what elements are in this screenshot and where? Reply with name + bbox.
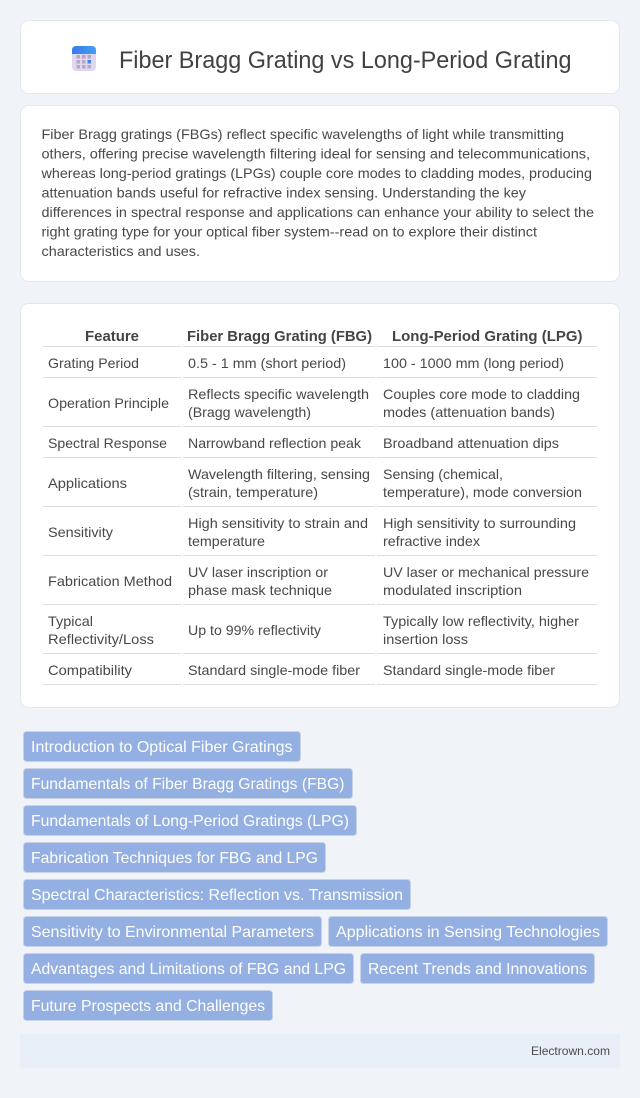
tag: recent trends bbox=[360, 954, 594, 984]
row: typical reflectivity/loss: Up to 99% reflectivity bbox=[188, 622, 321, 638]
row: typical reflectivity/loss bbox=[48, 613, 579, 647]
row: typical reflectivity/loss: Typical bbox=[48, 613, 93, 629]
row: operation principle: Couples core mode to cladding bbox=[383, 386, 580, 402]
tag: advantages: Advantages and Limitations of FBG and LPG bbox=[31, 961, 346, 978]
tag: applications: Applications in Sensing Technologies bbox=[336, 924, 600, 941]
tag: fundamentals of FBG: Fundamentals of Fiber Bragg Gratings (FBG) bbox=[31, 776, 344, 793]
row: grating period: 100 - 1000 mm (long period) bbox=[383, 355, 564, 371]
row: fabrication method: UV laser or mechanical pressure bbox=[383, 564, 589, 580]
tag: spectral characteristics: Spectral Characteristics: Reflection vs. Transmission bbox=[31, 887, 403, 904]
row: sensitivity: High sensitivity to strain and bbox=[188, 515, 368, 531]
table rule lines bbox=[43, 346, 597, 685]
row: operation principle: (Bragg wavelength) bbox=[188, 404, 311, 420]
tag: introduction bbox=[24, 732, 300, 762]
row: sensitivity: High sensitivity to surrounding bbox=[383, 515, 576, 531]
panel: introduction bbox=[20, 106, 620, 282]
tag: fabrication techniques: Fabrication Techniques for FBG and LPG bbox=[31, 850, 318, 867]
row: applications: Applications bbox=[48, 475, 127, 491]
intro paragraph: characteristics and uses. bbox=[42, 243, 200, 259]
intro paragraph: right grating type for your optical fiber system--read on to explore their distinct bbox=[42, 224, 537, 240]
header panel bbox=[20, 20, 620, 94]
row: operation principle: modes (attenuation bands) bbox=[383, 404, 555, 420]
row: fabrication method: phase mask technique bbox=[188, 582, 332, 598]
tag: future prospects: Future Prospects and Challenges bbox=[31, 998, 265, 1015]
row: fabrication method: modulated inscription bbox=[383, 582, 522, 598]
row: compatibility: Standard single-mode fiber bbox=[188, 662, 360, 678]
tag: recent trends: Recent Trends and Innovations bbox=[368, 961, 587, 978]
row: operation principle: Reflects specific wavelength bbox=[188, 386, 369, 402]
row: typical reflectivity/loss: Typically low reflectivity, higher bbox=[383, 613, 579, 629]
row: fabrication method bbox=[48, 564, 589, 598]
icon: calendar bbox=[72, 46, 96, 71]
row: grating period bbox=[48, 355, 564, 371]
intro paragraph: others, offering precise wavelength filtering ideal for sensing and telecommunications, bbox=[42, 146, 590, 162]
tag: fundamentals of FBG bbox=[24, 768, 352, 798]
row: applications: Wavelength filtering, sensing bbox=[188, 466, 370, 482]
row: applications: temperature), mode conversion bbox=[383, 484, 582, 500]
row: typical reflectivity/loss: Reflectivity/Loss bbox=[48, 631, 154, 647]
row: grating period: 0.5 - 1 mm (short period) bbox=[188, 355, 346, 371]
table header row: Long-Period Grating (LPG) bbox=[392, 328, 582, 345]
table header row: Feature bbox=[85, 328, 139, 345]
panel: comparison table bbox=[20, 304, 620, 708]
tag: fundamentals of LPG bbox=[24, 806, 356, 836]
title: Fiber Bragg Grating vs Long-Period Grating bbox=[119, 47, 572, 74]
row: spectral response: Spectral Response bbox=[48, 435, 167, 451]
row: applications: (strain, temperature) bbox=[188, 484, 318, 500]
row: sensitivity bbox=[48, 515, 576, 549]
row: sensitivity: refractive index bbox=[383, 533, 480, 549]
tag: introduction: Introduction to Optical Fiber Gratings bbox=[31, 739, 292, 756]
table header row: Fiber Bragg Grating (FBG) bbox=[187, 328, 372, 345]
row: applications: Sensing (chemical, bbox=[383, 466, 503, 482]
intro paragraph: differences in spectral response and applications can enhance your ability to select the bbox=[42, 204, 594, 220]
tag: fabrication techniques bbox=[24, 842, 326, 872]
tag: sensitivity: Sensitivity to Environmental Parameters bbox=[31, 924, 314, 941]
row: fabrication method: UV laser inscription or bbox=[188, 564, 328, 580]
tag: applications bbox=[328, 916, 608, 946]
row: compatibility: Standard single-mode fiber bbox=[383, 662, 555, 678]
row: sensitivity: temperature bbox=[188, 533, 265, 549]
table header row bbox=[85, 328, 582, 345]
footer: Electrown.com bbox=[531, 1044, 610, 1058]
footer bbox=[20, 1034, 620, 1068]
tag: advantages bbox=[24, 954, 354, 984]
tag: fundamentals of LPG: Fundamentals of Long-Period Gratings (LPG) bbox=[31, 813, 349, 830]
intro paragraph: attenuation bands useful for refractive index sensing. Understanding the key bbox=[42, 184, 526, 200]
tag: spectral characteristics bbox=[24, 880, 410, 910]
row: operation principle: Operation Principle bbox=[48, 395, 169, 411]
row: grating period: Grating Period bbox=[48, 355, 139, 371]
topic tags bbox=[24, 732, 608, 1020]
tag: sensitivity bbox=[24, 916, 322, 946]
intro paragraph bbox=[40, 126, 594, 259]
row: spectral response: Narrowband reflection peak bbox=[188, 435, 362, 451]
row: operation principle bbox=[48, 386, 580, 420]
tag: future prospects bbox=[24, 990, 272, 1020]
row: sensitivity: Sensitivity bbox=[48, 524, 113, 540]
row: compatibility: Compatibility bbox=[48, 662, 132, 678]
row: applications bbox=[48, 466, 582, 500]
row: spectral response: Broadband attenuation dips bbox=[383, 435, 559, 451]
row: typical reflectivity/loss: insertion loss bbox=[383, 631, 468, 647]
row: compatibility bbox=[48, 662, 555, 678]
intro paragraph: Fiber Bragg gratings (FBGs) reflect specific wavelengths of light while transmitting bbox=[42, 126, 564, 142]
intro paragraph: whereas long-period gratings (LPGs) couple core modes to cladding modes, producing bbox=[40, 165, 592, 181]
row: spectral response bbox=[48, 435, 559, 451]
row: fabrication method: Fabrication Method bbox=[48, 573, 172, 589]
